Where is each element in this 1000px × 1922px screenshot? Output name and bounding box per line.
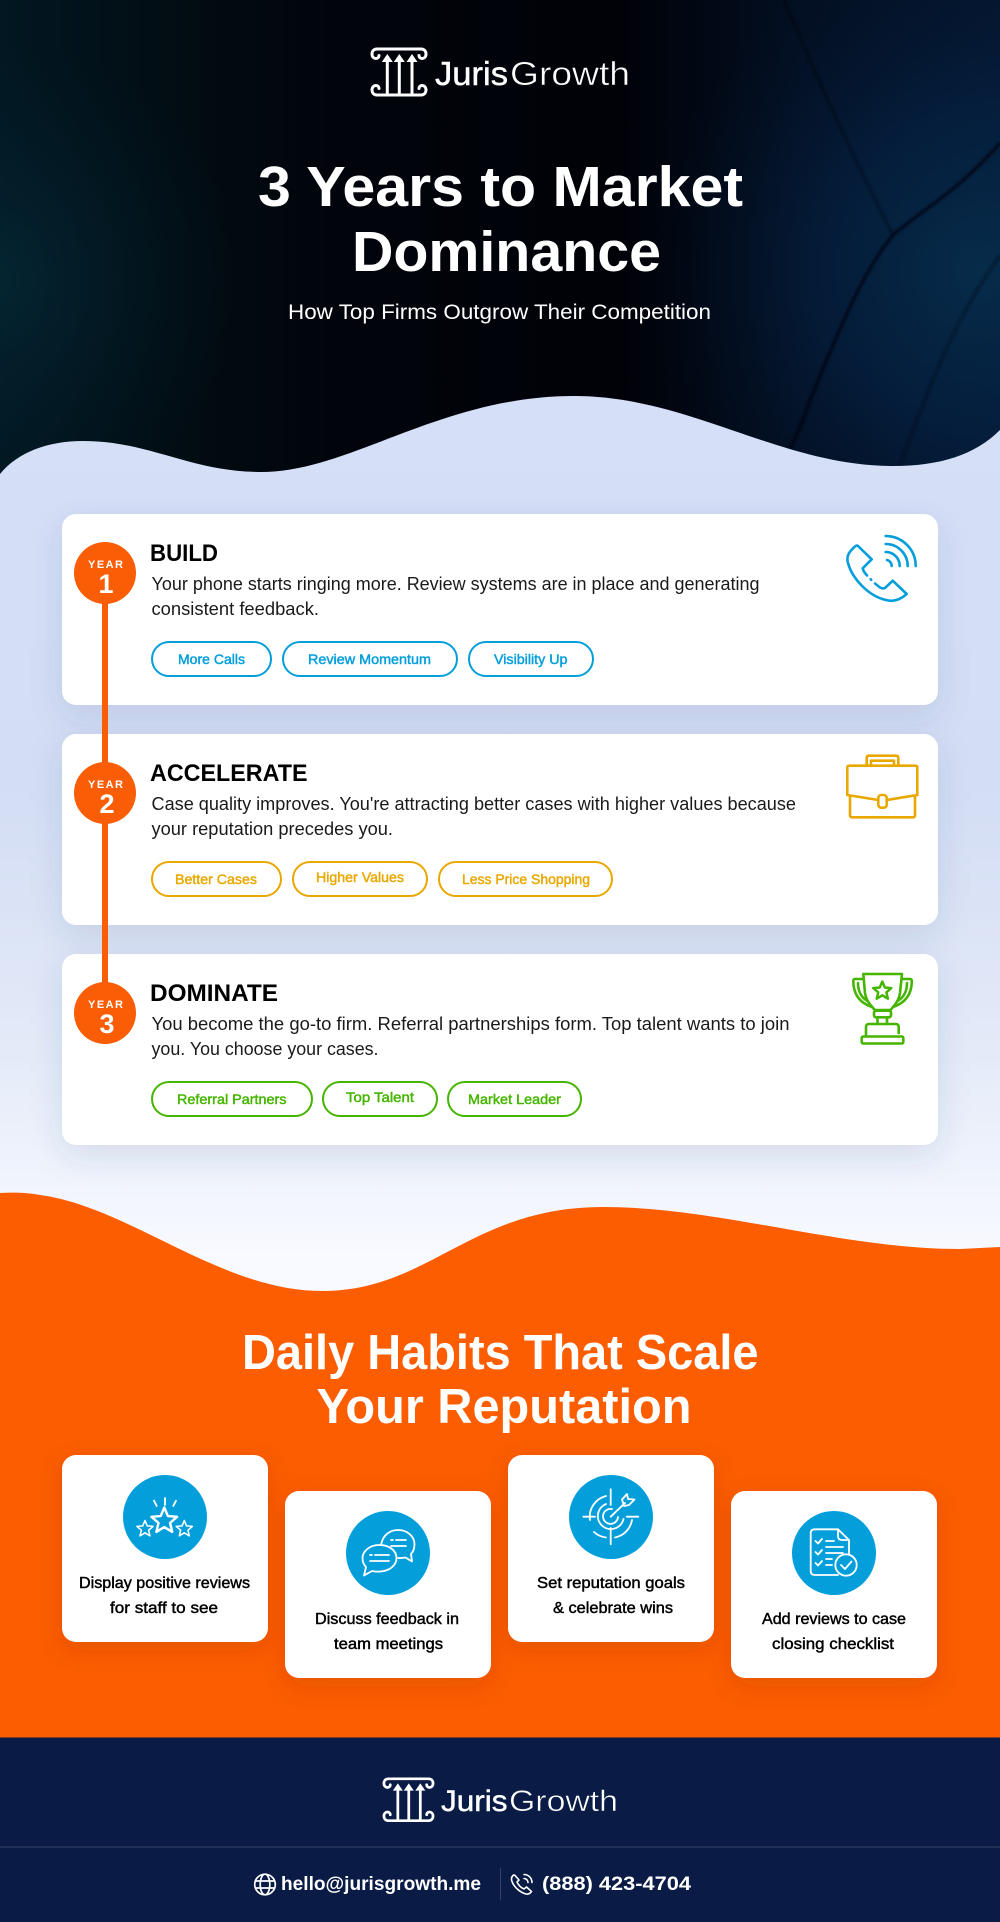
tags: build (152, 642, 593, 676)
icon: trophy (853, 974, 912, 1044)
card: discuss feedback (285, 1491, 491, 1678)
caption: Add reviews to case (762, 1611, 906, 1628)
icon: checklist (792, 1511, 876, 1595)
icon: phone (511, 1874, 532, 1894)
caption (537, 1575, 685, 1617)
phone contact: (888) 423-4704 (542, 1874, 691, 1895)
panel: year 2 accelerate (62, 734, 938, 925)
caption: team meetings (334, 1636, 443, 1653)
email contact: hello@jurisgrowth.me (281, 1874, 481, 1895)
badge: year 3: YEAR (88, 999, 123, 1011)
caption: Set reputation goals (537, 1575, 685, 1592)
panel: year 1 build (62, 514, 938, 705)
panel: year 2 accelerate: Better Cases (175, 871, 257, 887)
logo wordmark: Growth (510, 55, 630, 92)
title (258, 155, 743, 284)
caption: for staff to see (110, 1600, 218, 1617)
icon: globe (255, 1874, 275, 1895)
footer (0, 1738, 1000, 1922)
title: 3 Years to Market (258, 155, 743, 219)
description: accelerate: Case quality improves. You're attracting better cases with higher values because (152, 794, 796, 814)
habits heading: Daily Habits That Scale (242, 1326, 758, 1380)
card: display positive reviews (62, 1455, 268, 1642)
tags: accelerate (152, 862, 612, 896)
icon: three stars (123, 1475, 207, 1559)
description: build: Your phone starts ringing more. Review systems are in place and generating (152, 574, 760, 594)
description: accelerate: your reputation precedes you. (152, 819, 393, 839)
header logo (372, 49, 630, 95)
description: accelerate (152, 794, 796, 839)
icon: briefcase (847, 756, 917, 817)
habits heading (242, 1326, 758, 1434)
orange wave section (0, 1193, 1000, 1740)
description: dominate: You become the go-to firm. Referral partnerships form. Top talent wants to join (152, 1014, 789, 1034)
badge: year 2 (74, 762, 136, 824)
panel: year 2 accelerate: Higher Values (316, 869, 404, 885)
icon: target with arrow (569, 1475, 653, 1559)
footer logo (384, 1779, 618, 1821)
description: dominate: you. You choose your cases. (152, 1039, 378, 1059)
description: dominate (152, 1014, 789, 1059)
heading: dominate: DOMINATE (150, 980, 278, 1007)
panel: year 3 dominate: Top Talent (346, 1089, 414, 1105)
heading: accelerate: ACCELERATE (150, 760, 308, 787)
logo wordmark: Juris (435, 55, 508, 92)
badge: year 3 (74, 982, 136, 1044)
timeline connector (102, 600, 108, 985)
heading: build: BUILD (150, 540, 218, 567)
logo wordmark (435, 55, 630, 92)
subtitle: How Top Firms Outgrow Their Competition (288, 301, 711, 324)
caption (315, 1611, 459, 1653)
panel: year 1 build: Review Momentum (308, 651, 431, 667)
badge: year 1: 1 (98, 569, 114, 599)
icon: phone with signal (847, 536, 916, 601)
title: Dominance (352, 220, 661, 284)
caption (762, 1611, 906, 1653)
tags: dominate (152, 1082, 581, 1116)
description: build: consistent feedback. (152, 599, 319, 619)
panel: year 3 dominate: Referral Partners (177, 1091, 286, 1107)
caption (79, 1575, 250, 1617)
panel: year 1 build: Visibility Up (494, 651, 568, 667)
badge: year 3: 3 (99, 1009, 115, 1039)
panel: year 3 dominate: Market Leader (468, 1091, 561, 1107)
card: set reputation goals (508, 1455, 714, 1642)
badge: year 1 (74, 542, 136, 604)
caption: Discuss feedback in (315, 1611, 459, 1628)
light wave background (0, 396, 1000, 1300)
caption: closing checklist (772, 1636, 895, 1653)
description: build (152, 574, 760, 619)
footer logo: Growth (509, 1785, 618, 1818)
habits heading: Your Reputation (316, 1380, 692, 1434)
footer logo: Juris (441, 1785, 508, 1818)
panel: year 3 dominate (62, 954, 938, 1145)
icon: chat bubbles (346, 1511, 430, 1595)
badge: year 2: 2 (99, 789, 115, 819)
panel: year 1 build: More Calls (178, 651, 245, 667)
header background (0, 0, 1000, 490)
logo icon: column with arrows (372, 49, 426, 95)
badge: year 1: YEAR (88, 559, 123, 571)
panel: year 2 accelerate: Less Price Shopping (462, 871, 590, 887)
caption: Display positive reviews (79, 1575, 250, 1592)
caption: & celebrate wins (553, 1600, 673, 1617)
card: add reviews to checklist (731, 1491, 937, 1678)
badge: year 2: YEAR (88, 779, 123, 791)
